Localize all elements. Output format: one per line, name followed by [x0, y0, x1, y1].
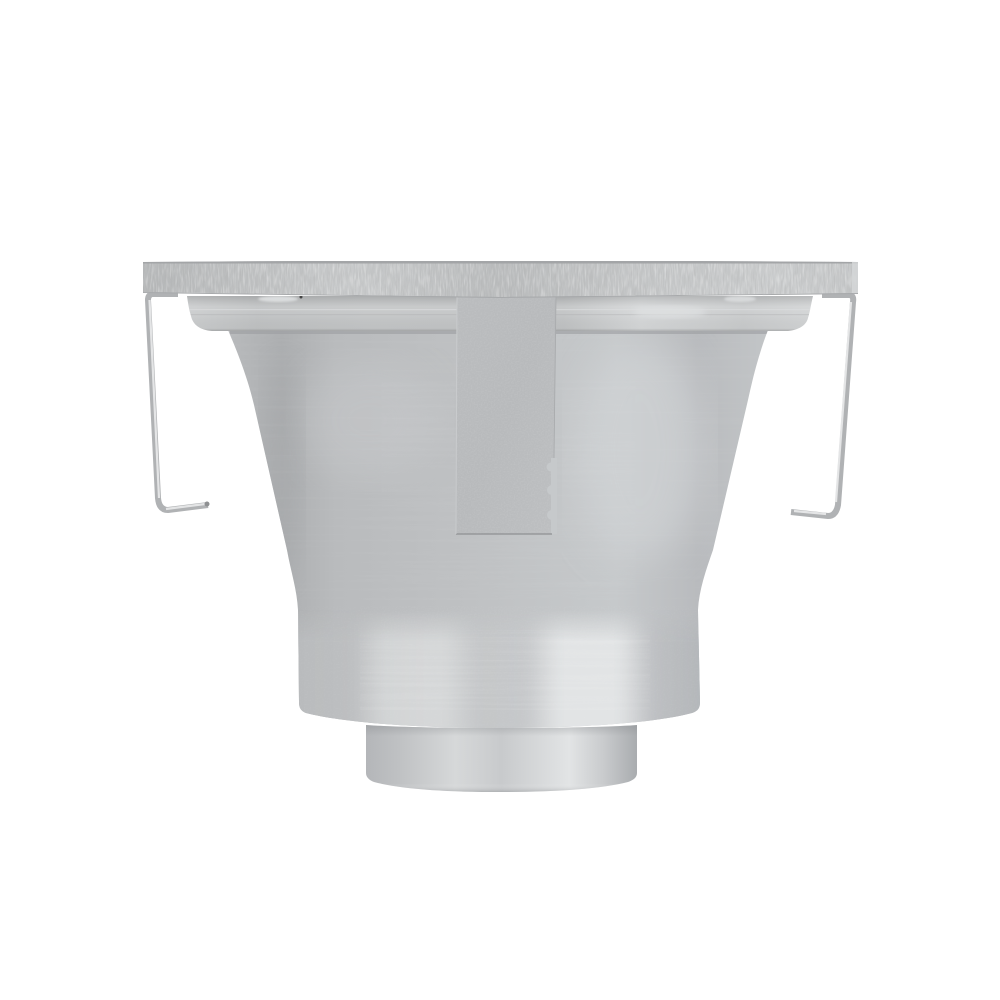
retaining tab: [456, 297, 557, 534]
left spring clip: [148, 294, 210, 510]
lower spigot: [366, 725, 637, 792]
tab edge scallops: [546, 458, 557, 534]
lower band highlights: [298, 619, 700, 728]
product photo: aluminium lamp housing: [143, 261, 858, 792]
upper rim: [180, 296, 820, 332]
flared body: [220, 325, 780, 740]
right spring clip: [791, 295, 853, 516]
top flange plate: [143, 261, 858, 298]
